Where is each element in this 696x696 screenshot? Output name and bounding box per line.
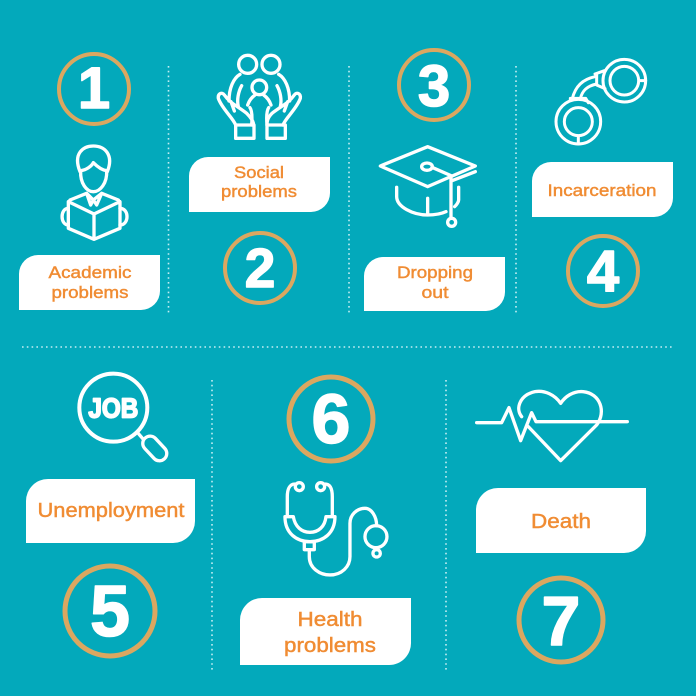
panel: unemployment	[26, 374, 195, 656]
icon: heart with pulse line	[477, 391, 627, 461]
number 3 badge: 3	[418, 54, 450, 119]
number 1 badge: 1	[78, 56, 110, 121]
label: Academic problems	[19, 255, 160, 310]
label: Academic problems: Academic	[48, 263, 132, 282]
icon: job magnifier	[79, 374, 170, 464]
number 5 badge	[65, 566, 155, 656]
label: Social problems: Social	[234, 163, 284, 182]
number 7 badge	[519, 578, 603, 662]
panel: social problems	[189, 55, 330, 303]
label: Death	[476, 488, 646, 553]
panel: death	[476, 391, 646, 662]
number 4 badge	[568, 236, 638, 306]
icon: job magnifier: JOB	[88, 392, 138, 423]
number 2 badge: 2	[245, 237, 275, 299]
number 4 badge: 4	[587, 239, 619, 304]
label: Health problems	[240, 598, 411, 665]
icon: handcuffs	[556, 59, 646, 144]
icon: family in hands	[218, 55, 300, 138]
label: Incarceration	[532, 162, 673, 217]
number 5 badge: 5	[90, 572, 130, 652]
label: Death: Death	[531, 510, 591, 533]
label: Incarceration: Incarceration	[548, 181, 656, 200]
panel: academic problems	[19, 54, 160, 310]
icon: graduation cap	[380, 147, 475, 226]
panel: health problems	[240, 377, 411, 665]
number 2 badge	[225, 233, 295, 303]
label: Social problems: problems	[221, 182, 297, 201]
label: Unemployment: Unemployment	[38, 500, 185, 522]
label: Academic problems: problems	[52, 283, 128, 302]
number 7 badge: 7	[542, 582, 580, 660]
label: Health problems: problems	[284, 635, 376, 657]
number 1 badge	[59, 54, 129, 124]
label: Unemployment	[26, 479, 195, 543]
label: Dropping out: out	[422, 283, 449, 302]
number 6 badge: 6	[312, 380, 350, 458]
icon: student reading book	[62, 146, 127, 239]
label: Health problems: Health	[298, 609, 362, 631]
label: Dropping out: Dropping	[397, 263, 473, 282]
number 6 badge	[289, 377, 373, 461]
label: Dropping out	[364, 257, 505, 311]
number 3 badge	[399, 50, 469, 120]
label: Social problems	[189, 157, 330, 212]
icon: stethoscope	[285, 483, 387, 575]
panel: dropping out	[364, 50, 505, 311]
panel: incarceration	[532, 59, 673, 306]
